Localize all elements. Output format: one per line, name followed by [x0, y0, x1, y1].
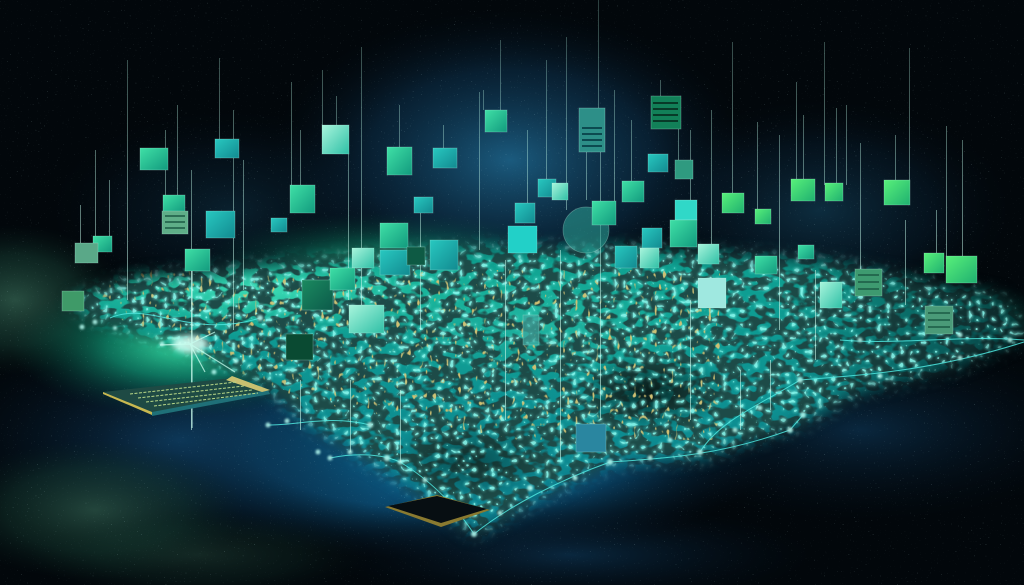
- network: shoreline traces and glowing nodes: [80, 313, 1024, 537]
- glow: bright light burst above the keyboard: [160, 270, 235, 428]
- glow: green light over the left of the city: [10, 212, 1024, 417]
- city: dense network of blocks and lights: [69, 236, 1024, 545]
- floating data panels: [62, 96, 977, 452]
- icon: smartphone at bottom centre: [385, 495, 490, 527]
- vertical data lines rising from the city: [80, 0, 962, 462]
- icon: keyboard device at lower left: [103, 376, 270, 416]
